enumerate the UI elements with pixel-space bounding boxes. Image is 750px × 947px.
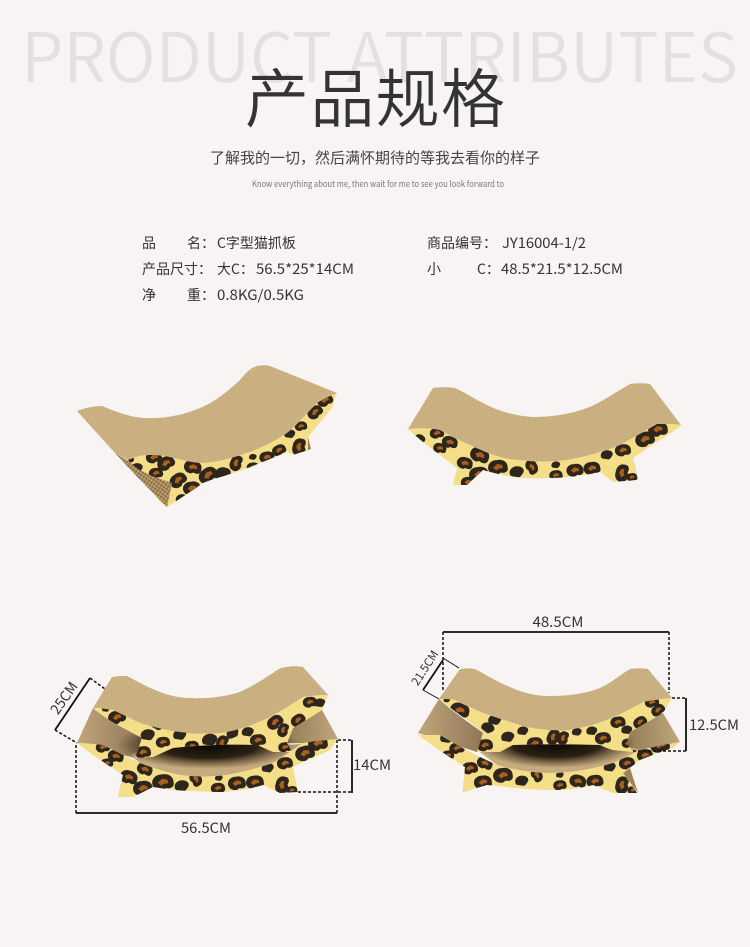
spec: small size: 48.5*21.5*12.5CM	[501, 259, 623, 279]
dimension: 56.5CM width: 56.5CM	[181, 818, 231, 838]
spec: small size: C：	[477, 259, 500, 279]
lower scratcher leopard band	[77, 736, 338, 797]
spec: product name: C字型猫抓板	[217, 233, 296, 253]
lower scratcher leopard band	[418, 733, 680, 796]
spec: large size: 大C：	[217, 259, 254, 279]
dimension: 25CM depth: 25CM	[46, 678, 82, 718]
spec: net weight: 0.8KG/0.5KG	[217, 285, 304, 305]
spec: net weight: 净	[142, 285, 156, 305]
background heading: PRODUCT ATTRIBUTES: PRODUCT ATTRIBUTES	[21, 3, 738, 102]
upper scratcher top surface	[439, 668, 672, 730]
dimension: 25CM depth	[46, 678, 105, 743]
spec: small size: 小	[427, 259, 441, 279]
dimension: 21.5CM depth	[408, 647, 459, 699]
spec: large size: 56.5*25*14CM	[256, 259, 354, 279]
lower scratcher inner surface	[418, 699, 680, 793]
upper scratcher leopard band	[439, 697, 672, 752]
spec: product code: 商品编号：	[427, 233, 497, 253]
dimension: 48.5CM width: 48.5CM	[532, 612, 584, 632]
spec: product name: 品	[142, 233, 156, 253]
spec: product name	[142, 233, 296, 253]
upper scratcher leopard band	[93, 695, 328, 758]
lower scratcher inner surface	[77, 708, 338, 797]
spec: small size	[427, 259, 623, 279]
dimension: 14CM height	[298, 740, 391, 793]
upper scratcher top surface	[93, 666, 328, 734]
subtitle Chinese: 了解我的一切，然后满怀期待的等我去看你的样子	[210, 147, 540, 168]
spec: net weight	[142, 285, 304, 305]
dimension: 14CM height: 14CM	[353, 755, 391, 775]
title: 产品规格	[245, 49, 505, 141]
dimension: 12.5CM height	[633, 698, 739, 751]
product diagram: small stacked scratchers	[418, 668, 680, 796]
spec: large size: 产品尺寸：	[142, 259, 212, 279]
dimension: 21.5CM depth: 21.5CM	[408, 647, 442, 689]
product photo: large scratcher, angled view	[77, 365, 337, 507]
subtitle English: Know everything about me, then wait for me to see you look forward to	[252, 178, 504, 190]
spec: net weight: 重：	[187, 285, 215, 305]
spec: product code: JY16004-1/2	[502, 233, 586, 253]
specification table	[142, 233, 623, 305]
spec: large size	[142, 259, 354, 279]
product photo: large scratcher, front view	[408, 383, 681, 488]
dimension: 12.5CM height: 12.5CM	[689, 715, 739, 735]
spec: product code	[427, 233, 586, 253]
spec: product name: 名：	[187, 233, 215, 253]
product diagram: large stacked scratchers	[77, 666, 338, 797]
